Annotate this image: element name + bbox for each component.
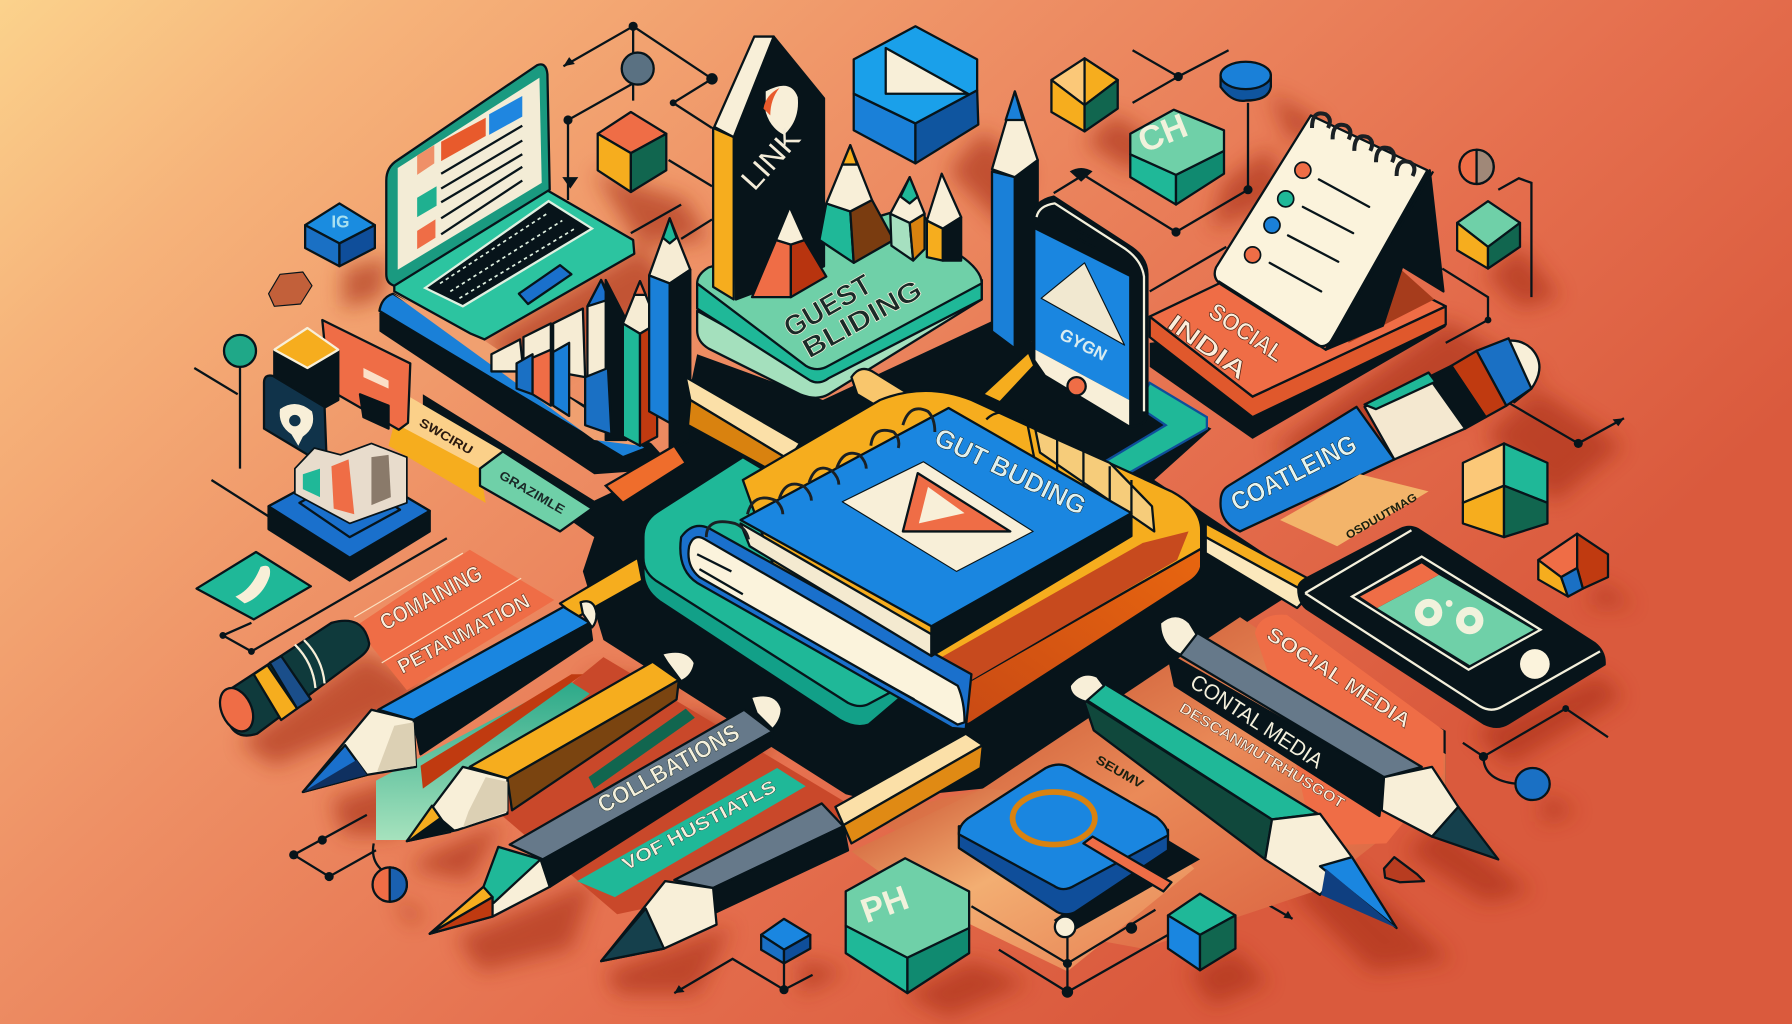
back cover [680, 526, 971, 729]
book title: GUT BUDING [930, 422, 1091, 521]
magnifier ring [1013, 792, 1095, 845]
laptop base [394, 190, 634, 339]
small red-yellow-green cube [598, 112, 666, 192]
laptop trackpad [519, 265, 571, 304]
search label: SEUMV [1093, 753, 1147, 792]
gear icons [1415, 599, 1483, 634]
connectors below magnifier [971, 906, 1168, 997]
platform teal edge [697, 280, 982, 382]
social label: SOCIAL [1204, 298, 1289, 368]
phone speaker [1074, 229, 1097, 249]
notepad rings [1312, 113, 1414, 176]
phone label: GYGN [1056, 324, 1110, 365]
phone red bar [1360, 563, 1439, 608]
pencil cream section [1365, 377, 1465, 459]
phone home button [1520, 649, 1550, 679]
small pencils [890, 214, 913, 261]
phone triangle [1041, 263, 1125, 345]
brown shadow on platform [931, 531, 1189, 683]
soft shadows [240, 91, 1634, 1017]
platform top [697, 206, 982, 369]
tall blue pencil [992, 91, 1038, 349]
teal bracket under phone [1103, 383, 1207, 480]
social media label: SOCIAL MEDIA [1262, 623, 1415, 733]
IG blue cube [305, 203, 375, 266]
phone body [1297, 526, 1606, 728]
teal blue cube [1168, 894, 1235, 970]
link label: LINK [735, 122, 807, 197]
small ball right [1459, 150, 1494, 184]
left panels stack [389, 397, 592, 531]
teal strip behind yellow pencil [376, 680, 590, 840]
cover triangle [903, 473, 1010, 531]
blue cylinder [1221, 62, 1271, 101]
phone body [1033, 197, 1147, 426]
green hexagon block [1130, 107, 1224, 205]
social media pill [1255, 615, 1443, 846]
tag hole [766, 86, 798, 135]
paper wedges [491, 339, 523, 371]
green strip [480, 451, 592, 531]
cones on platform [752, 145, 961, 297]
link tag [713, 37, 824, 299]
guest label: GUEST [778, 268, 878, 344]
collaborations label: COLLBATIONS [593, 719, 744, 819]
lower left panel [457, 657, 851, 914]
phone blue screen [1035, 230, 1129, 400]
green label strip [577, 768, 806, 897]
green strip label: GRAZIMLE [497, 468, 567, 517]
phone button [1067, 377, 1086, 395]
strip label: SWCIRU [417, 416, 475, 457]
small blue cube bottom [761, 919, 810, 963]
yellow strip [394, 397, 503, 486]
pencil dark [587, 280, 621, 377]
magnifier handle [1083, 837, 1171, 891]
laptop screen content [398, 78, 542, 270]
black road network [423, 320, 1309, 800]
guest building platform [697, 206, 982, 398]
yellow platform side [961, 549, 1201, 724]
book pages [688, 537, 965, 725]
notepad stand [1326, 170, 1443, 350]
red cone [752, 240, 791, 297]
large green hexagon [846, 858, 969, 993]
notepad lines [1270, 179, 1369, 291]
phone outline [1305, 530, 1600, 710]
gray pencil collaborations [430, 695, 782, 934]
block top [959, 765, 1168, 889]
right gold panel [1280, 474, 1429, 546]
book blue cover [741, 408, 1131, 626]
notepad checks [1245, 162, 1311, 263]
black cube with yellow top [274, 328, 338, 417]
light panel below magnifier [851, 789, 1194, 971]
tile glyph [235, 566, 270, 603]
connector nodes [219, 22, 1624, 994]
laptop keyboard [425, 201, 592, 306]
hexagon glyph: PH [856, 879, 914, 931]
sculpture [295, 443, 407, 523]
phone mint screen [1377, 575, 1534, 665]
laptop screen frame [386, 64, 550, 286]
petanmation label: PETANMATION [394, 590, 534, 679]
dark cylinder marker [213, 621, 369, 737]
description label: DESCANMUTRHUSGOT [1176, 701, 1347, 812]
smartphone [1033, 197, 1147, 426]
gold panel label: OSDUUTMAG [1344, 492, 1419, 542]
notepad sheet [1215, 115, 1427, 346]
tag black face [734, 37, 824, 299]
platform base [697, 280, 982, 398]
blue stand with sculpture [269, 443, 430, 581]
blue hexagon block [854, 26, 978, 163]
red strip below blue pencil [421, 674, 583, 789]
IG label: IG [331, 211, 350, 231]
pencil blue tall [649, 218, 690, 283]
cover label [842, 462, 1033, 571]
blue laptop platform [379, 294, 674, 474]
stand base [269, 463, 430, 581]
ball bottom left [373, 867, 407, 902]
pencil cluster [491, 218, 690, 451]
social media platform [1150, 269, 1446, 439]
cream node [1055, 917, 1075, 937]
blue pencil [303, 601, 597, 792]
connector ball top [622, 53, 654, 85]
tag yellow side [713, 128, 734, 299]
hexagon glyph: CH [1133, 107, 1193, 161]
rock lower right [1384, 857, 1424, 882]
coatling label: COATLEING [1226, 428, 1361, 517]
connector lines [194, 26, 1624, 993]
phone white footer [1035, 350, 1129, 425]
pie cube [1538, 534, 1608, 597]
lower right panel [869, 617, 1446, 949]
teal platform [643, 537, 914, 726]
building label: BLIDING [797, 273, 927, 364]
hustiatls label: VOF HUSTIATLS [618, 775, 780, 874]
magnifier block [959, 753, 1200, 937]
phone screen frame [1352, 557, 1541, 670]
black slab [1054, 840, 1200, 934]
mint ball left [224, 335, 256, 367]
contal media label: CONTAL MEDIA [1186, 669, 1328, 774]
red card [322, 320, 410, 430]
teal cone [819, 203, 854, 263]
yellow platform top [743, 391, 1201, 686]
book black side [931, 513, 1131, 656]
paper tabs [1035, 430, 1154, 531]
book top pages [741, 523, 931, 656]
yellow sticks [560, 352, 1310, 617]
notepad [1215, 113, 1443, 350]
ball lower right [1515, 768, 1550, 800]
laptop [386, 64, 634, 339]
mint tile [197, 552, 311, 619]
yellow-green cube top [1051, 58, 1118, 131]
hexagon triangle [886, 48, 968, 94]
orange road corner [606, 446, 686, 503]
comaining label: COMAINING [375, 560, 486, 635]
pencil blue label [1221, 407, 1394, 531]
hex pillar right [1463, 443, 1547, 537]
india label: INDIA [1162, 309, 1253, 385]
yellow bar and gray pencil [601, 734, 983, 961]
block side [959, 826, 1168, 914]
speech bubble [280, 404, 313, 446]
red label panel [354, 550, 554, 690]
right phone [1297, 526, 1606, 728]
phone bezel highlight [1037, 203, 1144, 411]
speech tile [264, 376, 327, 466]
yellow pencil [407, 652, 695, 841]
small rock [269, 272, 312, 306]
gray pencil right [1160, 616, 1498, 859]
coatling pencil [1221, 338, 1539, 531]
pencil cap stripes [1486, 341, 1539, 402]
teal pencil right [1070, 675, 1397, 928]
mint cube right [1457, 201, 1520, 269]
pencil green-red [623, 281, 657, 334]
spiral rings [706, 409, 935, 539]
central stack [643, 391, 1201, 729]
tag cream edge [714, 37, 774, 137]
